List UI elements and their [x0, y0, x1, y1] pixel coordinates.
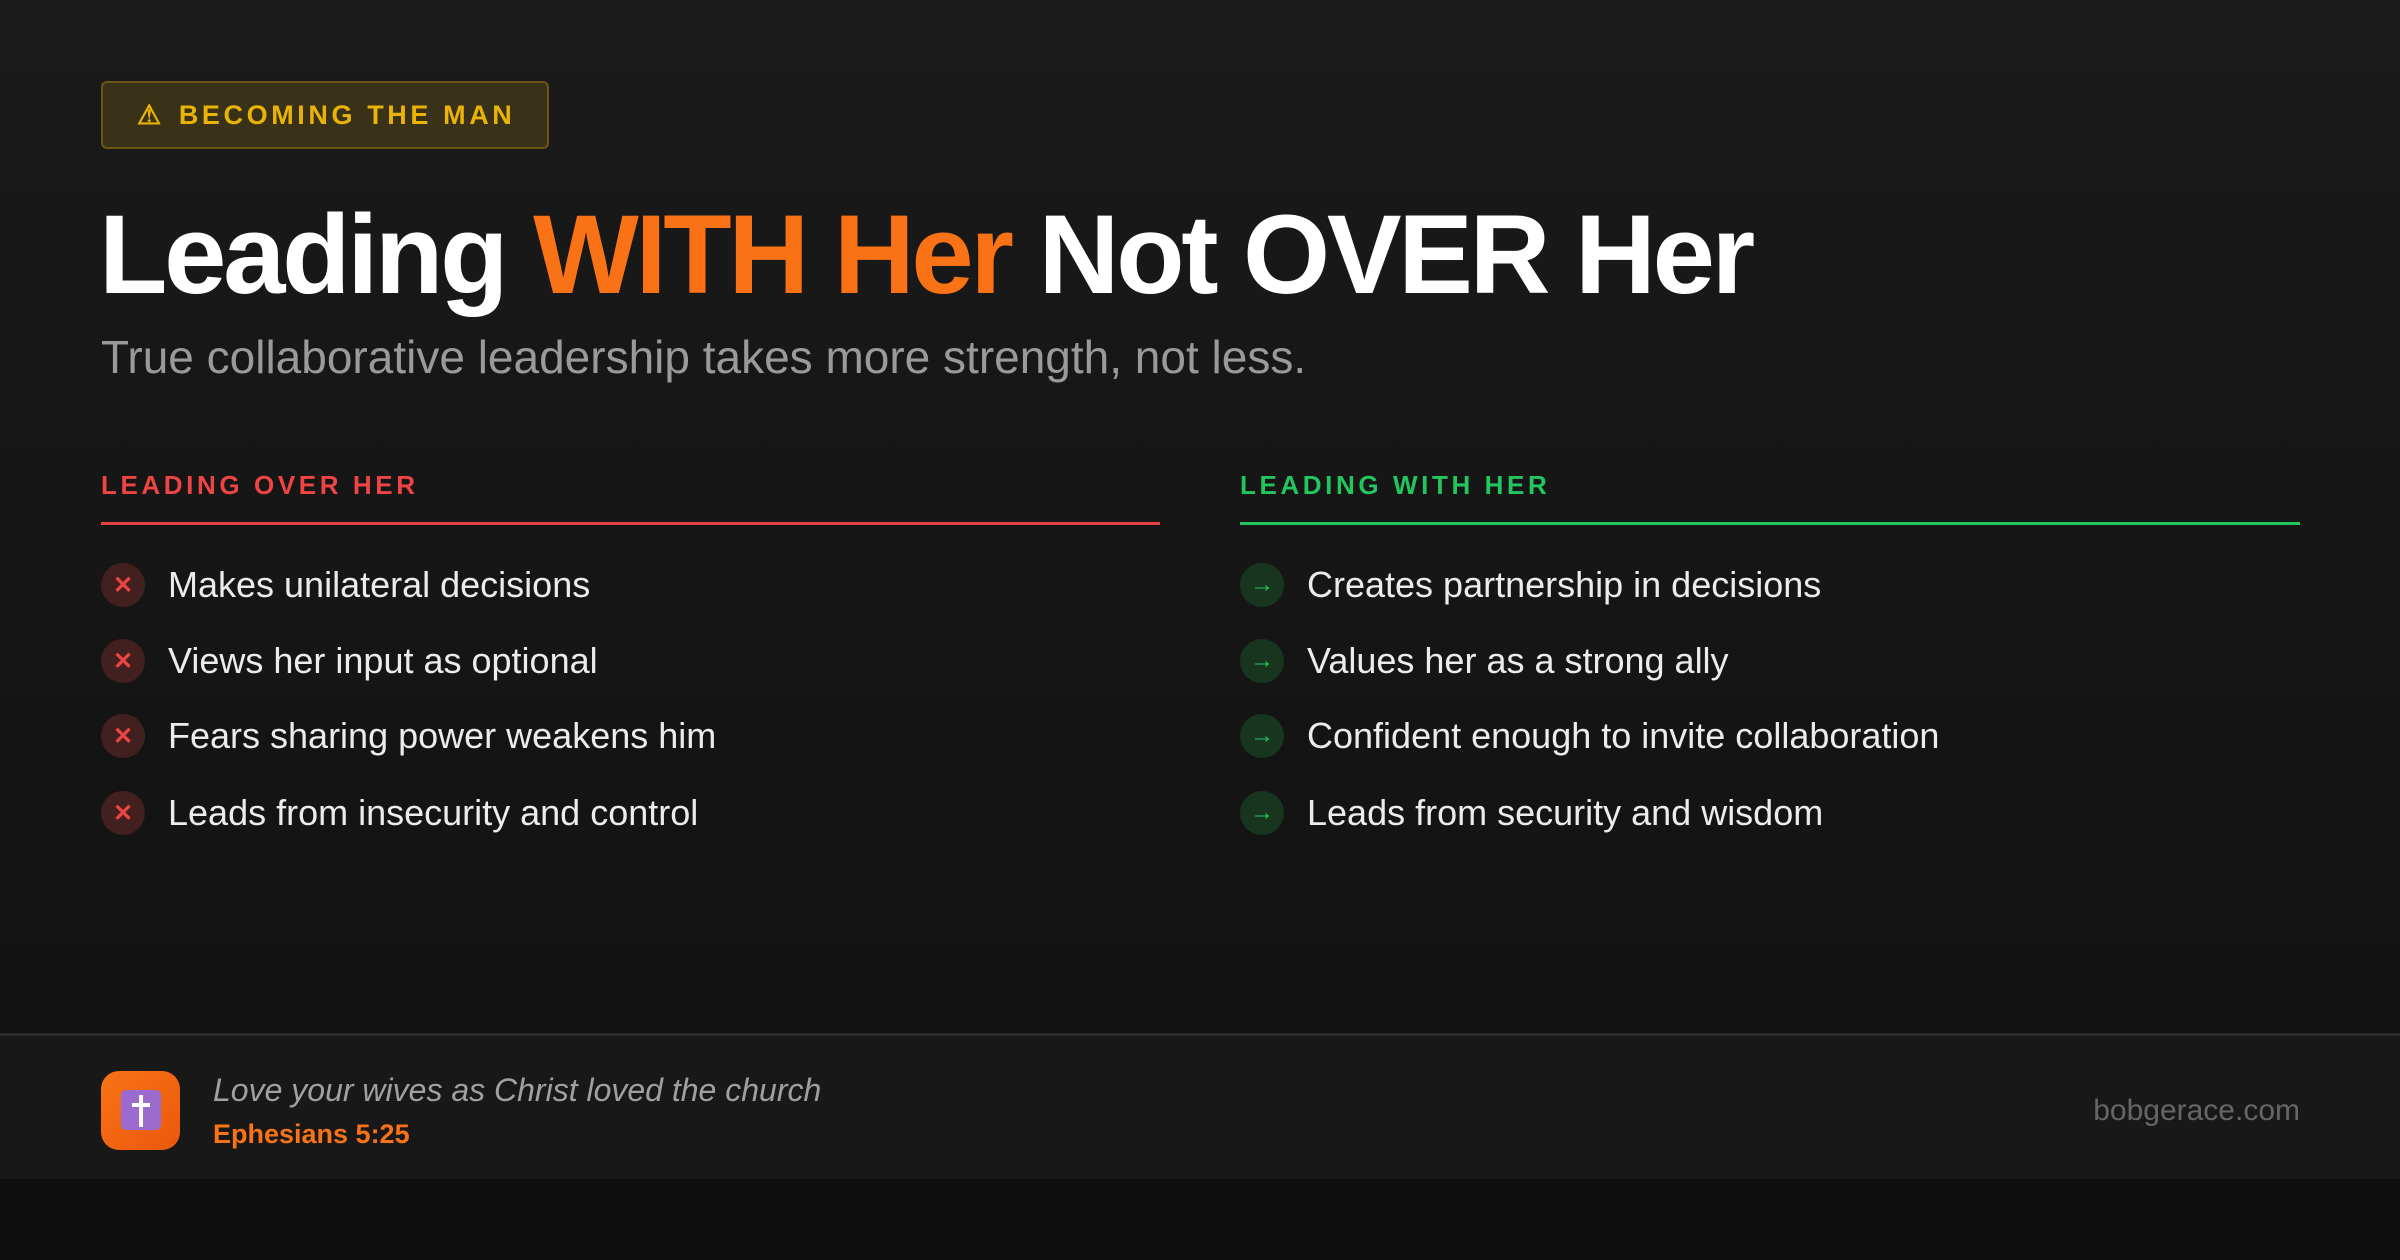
item 1: Creates partnership in decisions: [1307, 564, 1821, 605]
title: Leading WITH Her Not OVER Her: [99, 192, 1752, 317]
item 4: →: [1250, 799, 1274, 826]
item 2: Views her input as optional: [168, 640, 598, 681]
heading: leading with her: [1240, 470, 2300, 525]
footer: [0, 1033, 2400, 1179]
panel: leading over her: [101, 470, 1160, 835]
site: bobgerace.com: [2093, 1094, 2300, 1127]
badge: BECOMING THE MAN: [179, 100, 515, 130]
item 1: Makes unilateral decisions: [168, 564, 590, 605]
panel: leading with her: [1240, 470, 2300, 835]
heading: leading over her: LEADING OVER HER: [101, 470, 419, 500]
item 4: ✕: [113, 800, 133, 826]
item 4: Leads from security and wisdom: [1307, 792, 1823, 833]
item 1: ✕: [113, 572, 133, 598]
subtitle: True collaborative leadership takes more strength, not less.: [101, 331, 1306, 383]
item 3: ✕: [113, 722, 133, 750]
badge: ⚠: [137, 100, 165, 130]
heading: leading over her: [101, 470, 1160, 525]
item 2: Values her as a strong ally: [1307, 640, 1729, 681]
reference: Ephesians 5:25: [213, 1119, 410, 1149]
item 3: →: [1250, 722, 1274, 749]
item 1: →: [1250, 571, 1274, 598]
icon: cross: [101, 1071, 180, 1150]
item 2: ✕: [113, 648, 133, 674]
item 3: Fears sharing power weakens him: [168, 715, 716, 756]
item 4: Leads from insecurity and control: [168, 792, 698, 833]
badge: [101, 81, 549, 149]
quote: Love your wives as Christ loved the church: [213, 1072, 821, 1108]
heading: leading with her: LEADING WITH HER: [1240, 470, 1550, 500]
item 2: →: [1250, 647, 1274, 674]
item 3: Confident enough to invite collaboration: [1307, 715, 1939, 756]
